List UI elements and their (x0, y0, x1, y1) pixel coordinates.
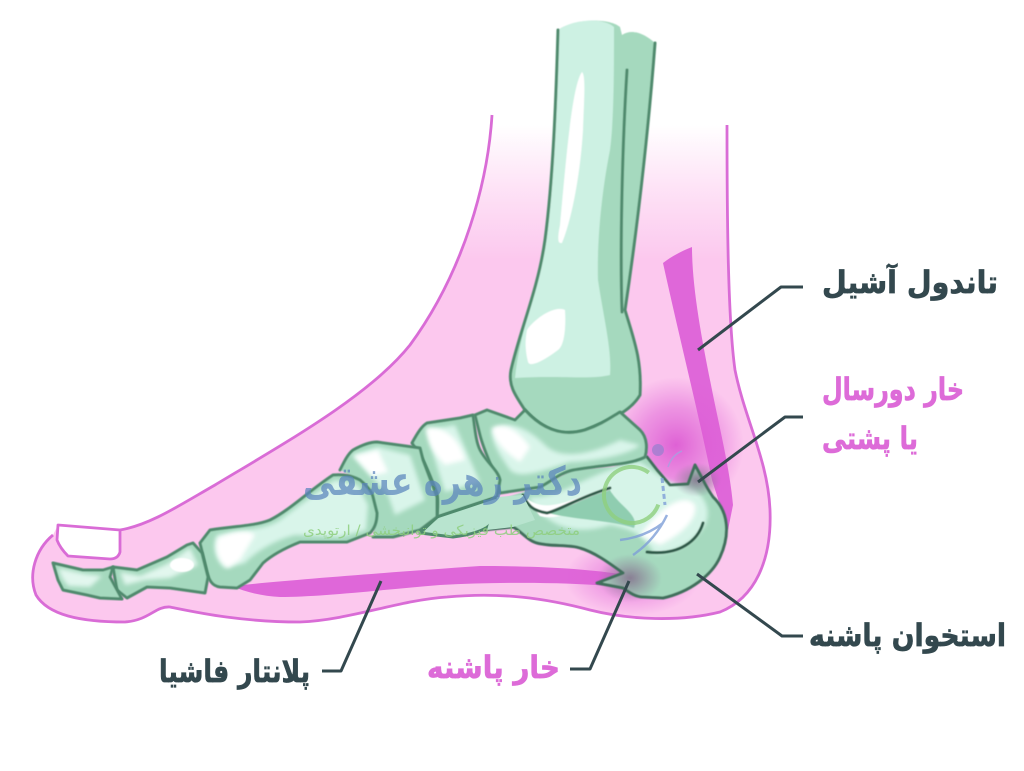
watermark subtitle: متخصص طب فیزیکی و توانبخشی / ارتوپدی (303, 523, 580, 539)
talus (475, 410, 646, 493)
inflammation glow under heel (564, 540, 700, 616)
watermark logo (596, 444, 682, 555)
label: achilles tendon: تاندول آشیل (822, 263, 998, 301)
cuneiform (340, 442, 437, 537)
cuboid (420, 497, 498, 537)
soft tissue: foot fill (33, 115, 770, 622)
toenail (57, 525, 120, 559)
leader line: plantar fascia (322, 581, 381, 671)
navicular (412, 415, 500, 517)
leader line: dorsal spur (698, 417, 803, 482)
leader line: calcaneus (697, 574, 803, 636)
label: dorsal spur (822, 372, 964, 457)
tibia and fibula (510, 21, 655, 433)
label: dorsal spur: خار دورسال (822, 372, 964, 408)
leader line: heel spur (570, 581, 629, 669)
label: dorsal spur: یا پشتی (822, 421, 918, 457)
plantar fascia (232, 566, 620, 597)
metatarsal (200, 475, 377, 588)
calcaneus heel bone (483, 457, 726, 602)
inflammation glow at back of heel (608, 377, 744, 513)
leader line: achilles tendon (698, 287, 803, 350)
foot outline: back and sole (33, 125, 770, 622)
label: plantar fascia: پلانتار فاشیا (159, 654, 310, 690)
midfoot connector (487, 495, 535, 530)
achilles tendon (663, 247, 733, 530)
label: heel spur: خار پاشنه (427, 650, 560, 686)
foot outline: top of foot (120, 115, 492, 530)
distal phalanx (53, 563, 122, 599)
middle phalanx (113, 543, 208, 598)
watermark name: دکتر زهره عشقی (303, 459, 582, 505)
